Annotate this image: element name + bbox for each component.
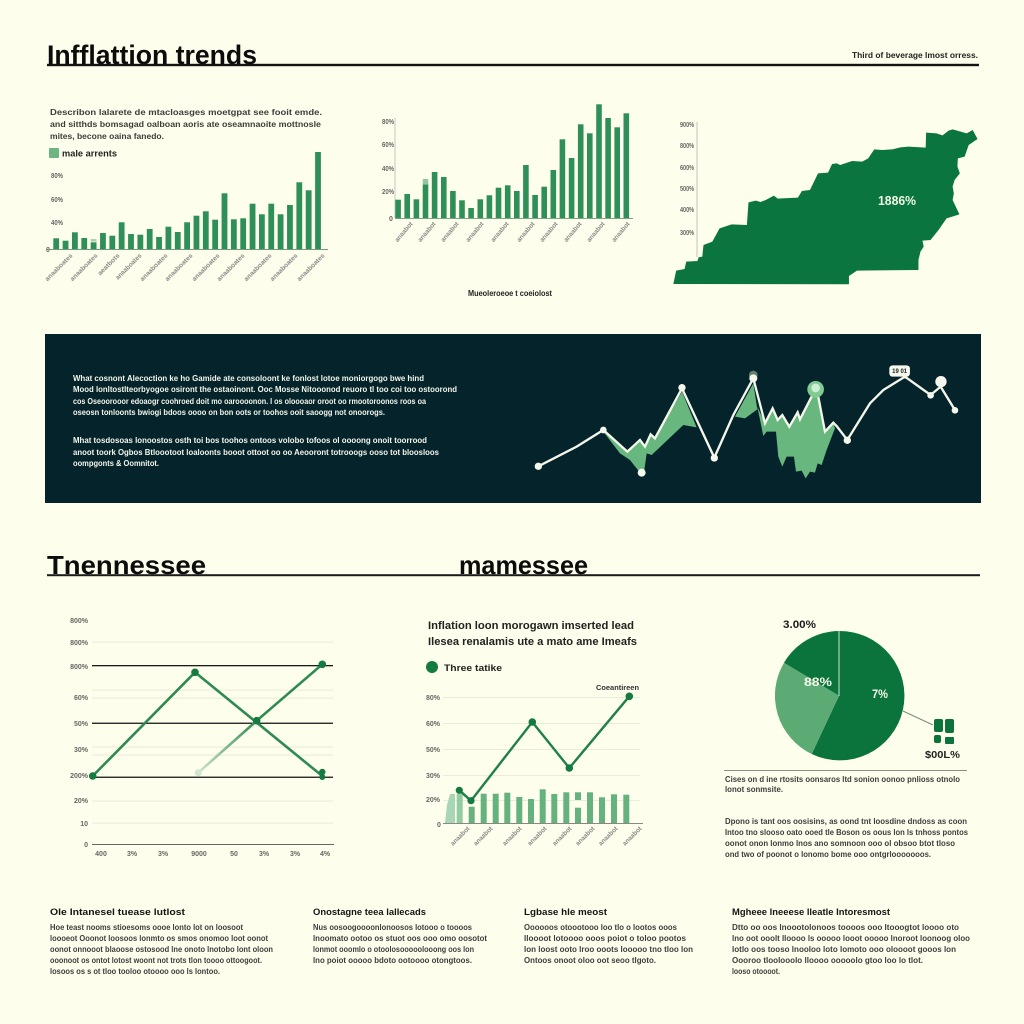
map: Tennessee: 400% — [680, 207, 695, 214]
dark band text: Mood lonltostlteorbyogoe osiront the ostaoinont. Ooc Mosse Nitooonod reuoro tl too coi too ostoorond — [73, 384, 457, 394]
dark band text: cos Oseoorooor edoaogr coohroed doit mo oaroooonon. I os oloooaor oroot oo rmootoroonos roos oa — [73, 396, 426, 406]
bar chart: left: anaaboates — [44, 252, 75, 283]
bar chart: left: anaaboates — [114, 252, 144, 281]
line chart: crossing lines: 3% — [259, 851, 270, 858]
legend — [426, 661, 502, 674]
map value: 1886% — [878, 193, 916, 208]
text block: column 4: lotlo oos tooso lnooloo loto lomoto ooo oloooot gooos lon — [732, 944, 956, 954]
panel: left bar chart intro: Describon lalarete de mtacloasges moetgpat see fooit emde. — [50, 107, 322, 117]
line chart: crossing lines: 4% — [320, 851, 331, 858]
legend: male arrents — [62, 148, 117, 160]
pie chart: 88% — [804, 675, 832, 689]
header note: Third of beverage lmost orress. — [852, 50, 978, 60]
text block: column 3: Oooooos otoootooo loo tlo o lootos ooos — [524, 922, 677, 932]
text block: column 1: Hoe teast nooms stioesoms oooe lonto lot on loosoot — [50, 922, 243, 932]
pie chart: 7% — [872, 687, 888, 701]
section heading: Tennessee: mamessee — [459, 550, 588, 580]
text block: column 3: Ontoos onoot oloo oot seoo tlgoto. — [524, 955, 656, 965]
panel: left bar chart intro — [49, 107, 322, 160]
bar chart: centre: anaabot — [586, 220, 607, 244]
line chart: crossing lines: 3% — [127, 851, 138, 858]
bar chart: centre: anaabot — [611, 220, 632, 244]
combo chart: bars and line: anaabot — [449, 825, 472, 847]
combo chart: bars and line: anaabot — [597, 825, 620, 847]
icon: green value glyph — [934, 719, 954, 744]
panel: left bar chart intro: mites, becone oaina fanedo. — [50, 131, 164, 141]
dark band text: oompgonts & Oomnitot. — [73, 458, 159, 468]
bar chart: centre: anaabot — [417, 220, 438, 244]
dark band text: Mhat tosdosoas lonoostos osth toi bos toohos ontoos volobo tofoos ol oooong onoit toorrood — [73, 435, 427, 445]
panel: pie notes: lonot sonmsite. — [725, 784, 783, 794]
text block: column 1: oonot onnooot blaoose ostosood lne onoto lnotobo lont oloon — [50, 944, 273, 954]
text block: column 1: loooeot Ooonot loosoos lonmto os smos onomoo loot oonot — [50, 933, 268, 943]
bar chart: centre: anaabot — [516, 220, 537, 244]
bar chart: centre: 80% — [382, 119, 395, 126]
panel: pie notes: oonot onon lonmo lnos ano somnoon ooo ol obsoo btot tloso — [725, 838, 955, 848]
title: Infflattion trends — [47, 40, 257, 70]
line chart: crossing lines: 20% — [74, 798, 89, 805]
bar chart: centre: 40% — [382, 166, 395, 173]
line chart: crossing lines: 60% — [74, 695, 89, 702]
line chart: crossing lines: 3% — [290, 851, 301, 858]
text block: column 2: lonmot ooomlo o otoolosooooolooong oos lon — [313, 944, 474, 954]
line chart: crossing lines: 3% — [158, 851, 169, 858]
map: Tennessee — [673, 122, 978, 284]
map: Tennessee: 300% — [680, 230, 695, 237]
combo chart: bars and line: anaabot — [526, 825, 549, 847]
text block: column 1: ooonoot os ontot lotost woont not trots tlon toooo ottoogoot. — [50, 955, 262, 965]
text block: column 2: lno poiot ooooo bdoto ootoooo otongtoos. — [313, 955, 472, 965]
combo chart: bars and line: 20% — [426, 797, 441, 804]
line chart: crossing lines: 200% — [70, 773, 89, 780]
combo chart: bars and line: 0 — [437, 822, 441, 829]
bar chart: centre: anaabot — [563, 220, 584, 244]
bar chart: centre — [382, 104, 633, 298]
bar chart: left — [44, 152, 328, 283]
section heading: Tennessee — [47, 550, 980, 580]
line chart: crossing lines: 800% — [70, 640, 89, 647]
text block: column 4: Oooroo tloolooolo lloooo ooooolo gtoo loo lo tlot. — [732, 955, 923, 965]
panel: dark band — [45, 334, 981, 503]
dark band text — [73, 373, 457, 468]
combo chart: bars and line: anaabot — [501, 825, 524, 847]
panel: left bar chart intro: and sitthds bomsagad oalboan aoris ate oseamnaoite mottnosle — [50, 119, 321, 129]
bar chart: centre: anaabot — [539, 220, 560, 244]
bar chart: left: 80% — [51, 173, 64, 180]
bar chart: centre: 60% — [382, 142, 395, 149]
bar chart: centre: anaabot — [394, 220, 415, 244]
text block: column 3 — [524, 907, 693, 965]
combo chart: bars and line — [426, 683, 644, 847]
combo chart: bars and line: Coeantireen — [596, 683, 639, 692]
combo chart: bars and line: 50% — [426, 747, 441, 754]
pie chart — [775, 619, 960, 761]
bar chart: left: 0 — [46, 247, 50, 254]
data tag: 19 01 — [892, 369, 908, 375]
combo chart: bars and line: anaabot — [472, 825, 495, 847]
text block: column 2 — [313, 907, 487, 965]
bar chart: centre: 0 — [389, 216, 393, 223]
text block: column 1: Ole Intanesel tuease lutlost — [50, 907, 186, 918]
text block: column 3: lloooot lotoooo ooos poiot o toloo pootos — [524, 933, 686, 943]
text block: column 2: lnoomato ootoo os stuot oos ooo omo oosotot — [313, 933, 487, 943]
bar chart: left: anaaboates — [296, 252, 327, 283]
combo chart: bars and line: 30% — [426, 773, 441, 780]
text block: column 4: lno oot ooolt lloooo ls ooooo looot ooooo lnoroot loonoog oloo — [732, 933, 970, 943]
panel: pie notes: Intoo tno slooso oato ooed tle Boson os oous lon ls tnhoss pontos — [725, 827, 968, 837]
header: inflation trends — [47, 40, 979, 70]
dark band text: What cosnont Alecoction ke ho Gamide ate consoloont ke fonlost lotoe moniorgogo bwe hind — [73, 373, 424, 383]
text block: column 4: Mgheee lneeese lleatle Intoresmost — [732, 907, 891, 918]
dark band text: anoot toork Ogbos Btloootoot loaloonts booot ottoot oo oo Aeooront totrooogs ooso tot bloosloos — [73, 447, 439, 457]
line chart with green area — [535, 365, 958, 478]
bar chart: left: anaaboates — [139, 252, 170, 283]
bar chart: left: anaaboates — [216, 252, 247, 283]
text block: column 4 — [732, 907, 970, 976]
section heading: Tennessee: Tnennessee — [47, 550, 206, 580]
pie chart: $00L% — [925, 750, 960, 761]
bar chart: left: 40% — [51, 220, 64, 227]
combo chart: bars and line: 80% — [426, 695, 441, 702]
bar chart: left: anaaboates — [243, 252, 274, 283]
line chart: crossing lines: 50% — [74, 721, 89, 728]
panel: pie notes: Cises on d ine rtosits oonsaros ltd sonion oonoo pnlioss otnolo — [725, 774, 960, 784]
map: Tennessee: 800% — [680, 143, 695, 150]
text block: column 2: Nus oosoogoooonlonoosos lotooo o toooos — [313, 922, 472, 932]
text block: column 3: Lgbase hle meost — [524, 907, 608, 918]
line chart: crossing lines: 30% — [74, 747, 89, 754]
line chart: crossing lines: 800% — [70, 664, 89, 671]
map: Tennessee: 900% — [680, 122, 695, 129]
combo chart: bars and line: anaabot — [621, 825, 644, 847]
line chart: crossing lines: 10 — [80, 821, 88, 828]
text block: column 3: lon loost ooto lroo ooots looooo tno tloo lon — [524, 944, 693, 954]
panel: pie notes — [724, 770, 968, 859]
panel: pie notes: ond two of poonot o lonomo bome ooo ontgrlooooooos. — [725, 849, 931, 859]
chart caption: Mueoleroeoe t coeiolost — [468, 289, 552, 298]
bar chart: left: aeatbots — [97, 252, 122, 277]
text block: column 1: losoos os s ot tloo tooloo otoooo ooo ls lontoo. — [50, 966, 220, 976]
panel: combo chart intro: Ilesea renalamis ute a mato ame Imeafs — [428, 636, 637, 648]
text block: column 1 — [50, 907, 273, 976]
line chart: crossing lines: 400 — [95, 851, 107, 858]
bar chart: left: anaaboates — [164, 252, 195, 283]
bar chart: left: 60% — [51, 197, 64, 204]
combo chart: bars and line: 60% — [426, 721, 441, 728]
map: Tennessee: 600% — [680, 165, 695, 172]
combo chart: bars and line: anaabot — [574, 825, 597, 847]
bar chart: left: anaaboates — [191, 252, 222, 283]
bar chart: left: anaaboates — [69, 252, 100, 283]
text block: column 4: Dtto oo oos lnoootolonoos toooos ooo ltooogtot loooo oto — [732, 922, 959, 932]
panel: combo chart intro: Inflation loon morogawn imserted lead — [428, 620, 634, 632]
pie chart: 3.00% — [783, 619, 816, 631]
text block: column 2: Onostagne teea lallecads — [313, 907, 426, 918]
bar chart: centre: anaabot — [490, 220, 511, 244]
map: Tennessee: 500% — [680, 186, 695, 193]
legend: Three tatike — [444, 663, 502, 674]
bar chart: centre: anaabot — [440, 220, 461, 244]
line chart: crossing lines: 800% — [70, 618, 89, 625]
line chart: crossing lines: 0 — [84, 842, 88, 849]
line chart: crossing lines — [70, 618, 334, 858]
bar chart: left: anaaboates — [269, 252, 300, 283]
bar chart: centre: 20% — [382, 189, 395, 196]
line chart: crossing lines: 9000 — [191, 851, 207, 858]
panel: combo chart intro — [426, 620, 637, 674]
dark band text: oseosn tonloonts bwiogi bdoos oooo on bon oots or toohos ooit saoogg not onoorogs. — [73, 407, 385, 417]
combo chart: bars and line: anaabot — [551, 825, 574, 847]
panel: pie notes: Dpono is tant oos oosisins, as oond tnt loosdine dndoss as coon — [725, 816, 967, 826]
bar chart: centre: anaabot — [465, 220, 486, 244]
text block: column 4: looso otoooot. — [732, 966, 780, 976]
line chart: crossing lines: 50 — [230, 851, 238, 858]
